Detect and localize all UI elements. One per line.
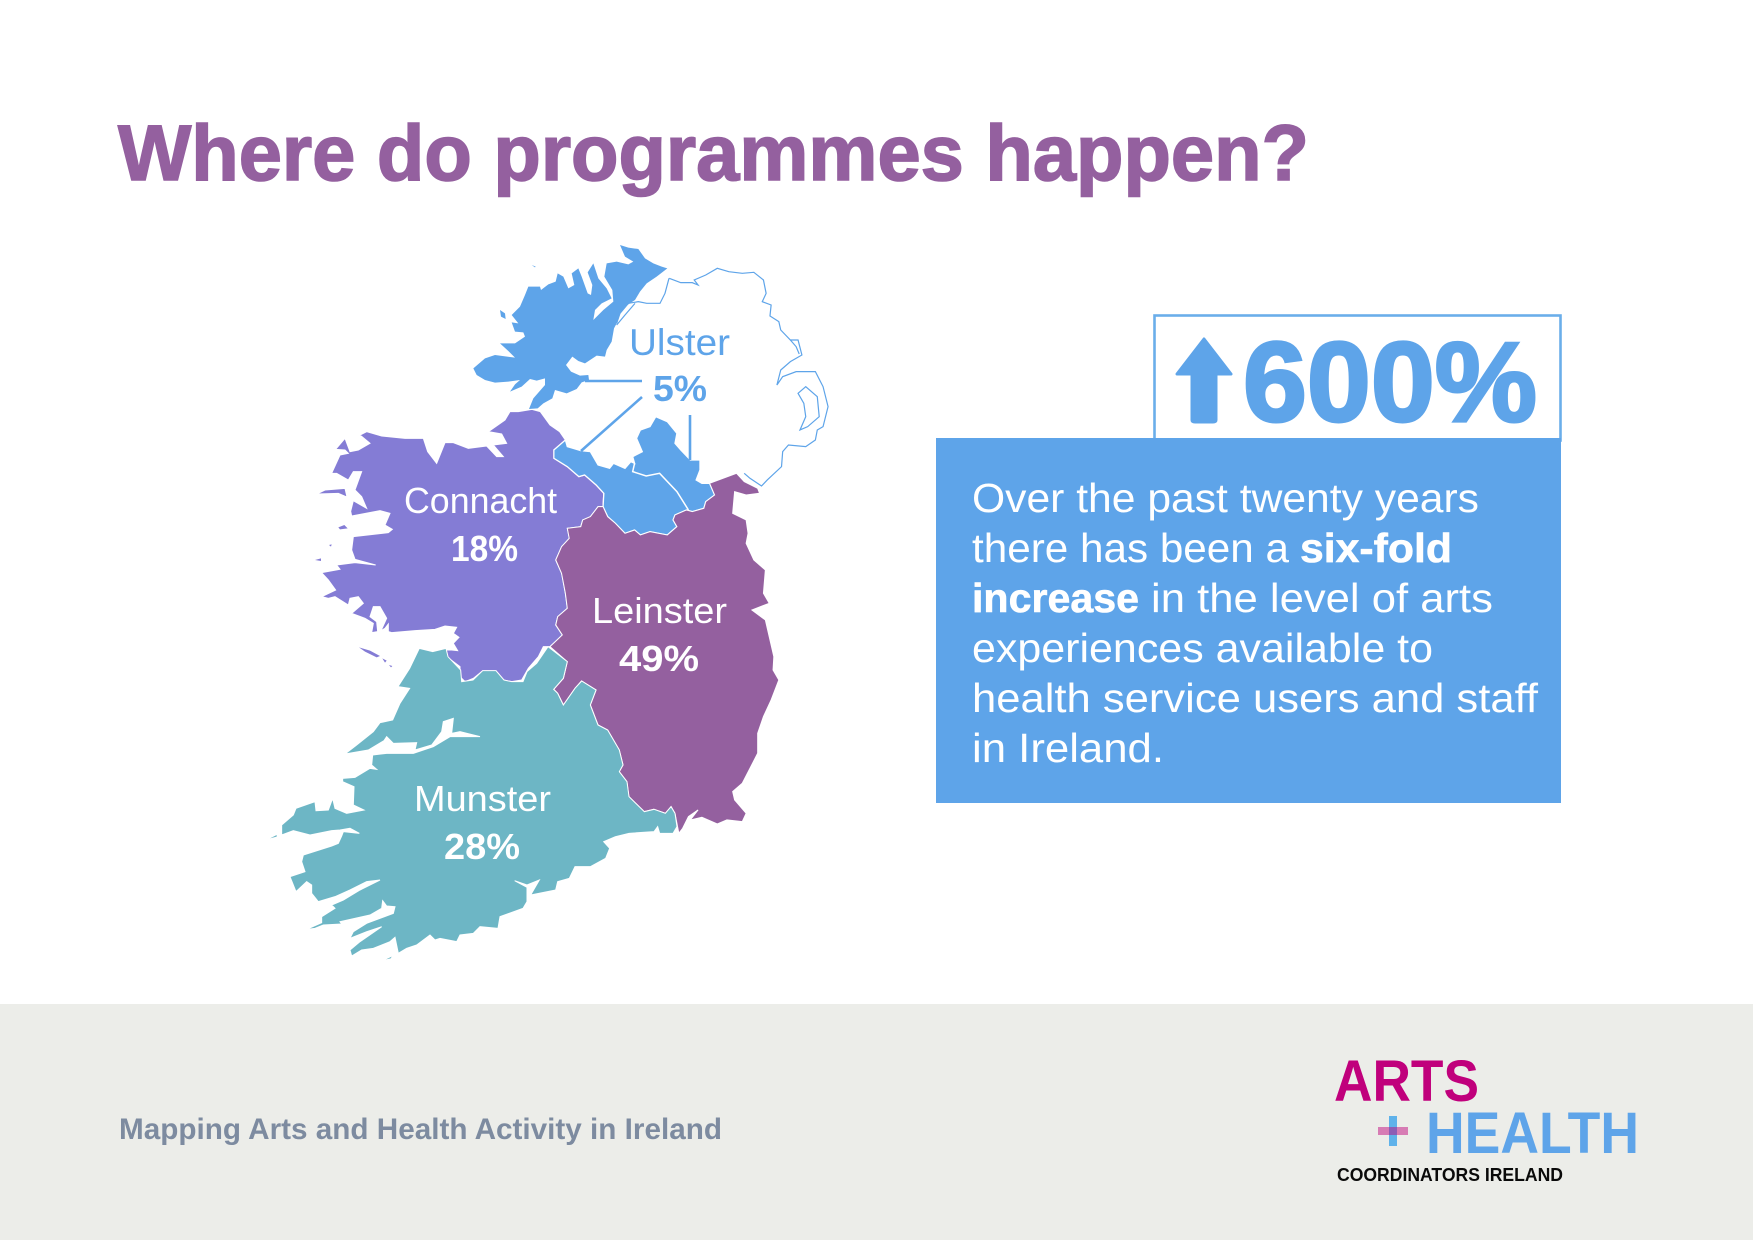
leader lines for Ulster bbox=[581, 381, 690, 460]
panel: six-fold increase text: in the level of arts bbox=[1151, 575, 1493, 621]
panel: six-fold increase text: six-fold bbox=[1300, 525, 1452, 571]
panel: six-fold increase text: experiences available to bbox=[972, 625, 1433, 671]
panel: six-fold increase text: health service users and staff bbox=[972, 675, 1539, 721]
region: Northern Ireland coastline outline bbox=[669, 268, 828, 486]
panel: six-fold increase text bbox=[936, 438, 1561, 803]
region: Munster bbox=[270, 647, 677, 959]
label: Connacht: Connacht bbox=[404, 480, 557, 521]
title: Where do programmes happen? bbox=[118, 108, 1309, 197]
panel: six-fold increase text: there has been a bbox=[972, 525, 1289, 571]
logo: Arts + Health Coordinators Ireland bbox=[1334, 1049, 1639, 1185]
region: Ulster, Donegal bbox=[473, 245, 669, 409]
icon: up arrow bbox=[1177, 339, 1231, 422]
logo: Arts + Health Coordinators Ireland: COORDINATORS IRELAND bbox=[1337, 1165, 1563, 1185]
panel: six-fold increase text: Over the past twenty years bbox=[972, 475, 1479, 521]
panel: six-fold increase text: increase bbox=[972, 575, 1139, 621]
value: Leinster 49%: 49% bbox=[619, 638, 699, 679]
logo: Arts + Health Coordinators Ireland: ARTS bbox=[1334, 1049, 1479, 1114]
panel: six-fold increase text: in Ireland. bbox=[972, 725, 1164, 771]
label: Munster: Munster bbox=[414, 778, 551, 819]
region: Ulster, Cavan and Monaghan bbox=[554, 417, 715, 535]
value: Connacht 18%: 18% bbox=[451, 528, 518, 569]
value: Ulster 5%: 5% bbox=[653, 368, 707, 409]
footer text: Mapping Arts and Health Activity in Ireland bbox=[119, 1113, 722, 1146]
value: 600%: 600% bbox=[1243, 319, 1537, 445]
value: Munster 28%: 28% bbox=[444, 826, 520, 867]
icon: plus bbox=[1378, 1116, 1408, 1146]
region: Connacht bbox=[315, 409, 604, 682]
label: Ulster: Ulster bbox=[629, 322, 730, 363]
logo: Arts + Health Coordinators Ireland: HEALTH bbox=[1426, 1101, 1639, 1166]
region: Leinster bbox=[550, 473, 779, 833]
label: Leinster: Leinster bbox=[592, 590, 727, 631]
callout: 600% box bbox=[1154, 316, 1560, 445]
map of Ireland bbox=[270, 245, 828, 959]
footer band bbox=[0, 1004, 1753, 1240]
